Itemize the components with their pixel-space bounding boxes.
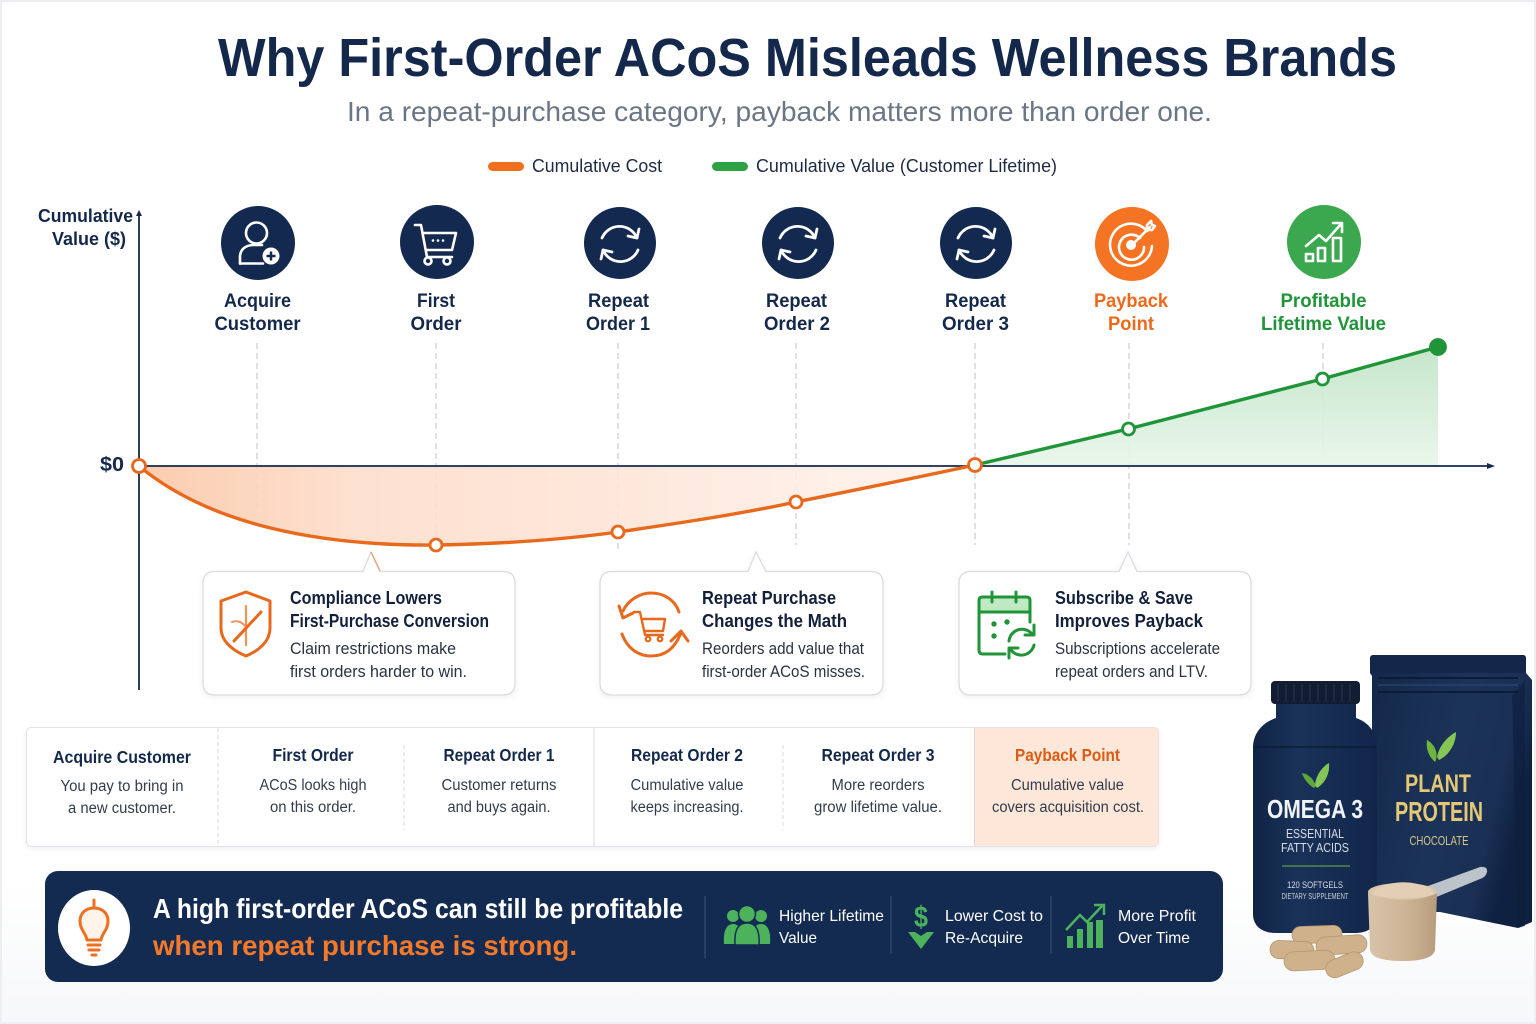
takeaway banner xyxy=(45,871,1223,982)
axis label: Cumulative xyxy=(38,206,133,226)
milestone: Repeat Order 3 xyxy=(940,207,1012,335)
stage: Repeat Order 3 xyxy=(814,745,942,816)
milestone: Payback Point: Payback xyxy=(1094,290,1168,312)
orange cost area xyxy=(139,465,975,545)
omega 3 bottle: ESSENTIAL xyxy=(1286,826,1344,841)
value line xyxy=(975,347,1438,465)
milestone: Payback Point: Point xyxy=(1108,313,1154,335)
milestone: Profitable Lifetime Value xyxy=(1261,205,1386,335)
product illustration xyxy=(1253,655,1532,980)
icon: light bulb xyxy=(58,890,130,966)
callout: Compliance xyxy=(203,552,515,695)
callout: Repeat Purchase: first-order ACoS misses. xyxy=(702,663,865,681)
milestone: Payback Point xyxy=(1094,207,1169,335)
callout: Compliance: Claim restrictions make xyxy=(290,640,456,658)
legend: Cumulative Cost xyxy=(532,156,662,176)
stage: Repeat Order 1: Repeat Order 1 xyxy=(444,745,555,765)
stage: Repeat Order 3: grow lifetime value. xyxy=(814,799,942,816)
protein pouch: PROTEIN xyxy=(1395,796,1483,827)
omega 3 bottle: DIETARY SUPPLEMENT xyxy=(1282,892,1349,901)
benefit: Lower Cost to Re-Acquire: Re-Acquire xyxy=(945,930,1023,947)
axis label second line: Value ($) xyxy=(52,229,126,249)
data points xyxy=(132,340,1446,551)
benefit: More Profit Over Time: More Profit xyxy=(1118,908,1197,925)
stage: Repeat Order 2 xyxy=(630,745,744,816)
stage description strip xyxy=(26,728,1158,846)
callout: Compliance: Compliance Lowers xyxy=(290,587,442,608)
stage: Payback Point: Cumulative value xyxy=(1011,777,1124,794)
protein pouch xyxy=(1370,655,1532,928)
capsules xyxy=(1270,925,1368,980)
stage: Repeat Order 3: More reorders xyxy=(832,777,925,794)
payback highlight cell xyxy=(975,728,1158,846)
stage: Repeat Order 2: keeps increasing. xyxy=(630,799,744,816)
benefit: Lower Cost to Re-Acquire xyxy=(908,901,1043,949)
green value area xyxy=(975,347,1438,466)
stage: First Order: ACoS looks high xyxy=(260,777,366,794)
milestone: Repeat Order 2 xyxy=(762,207,834,335)
milestone: Repeat Order 1 xyxy=(584,207,656,335)
benefit: Lower Cost to Re-Acquire: $ xyxy=(914,901,928,934)
milestone: Acquire Customer: Customer xyxy=(214,313,301,335)
cost line xyxy=(139,465,975,545)
callout: Repeat Purchase: Reorders add value that xyxy=(702,640,864,658)
benefit: More Profit Over Time: Over Time xyxy=(1118,930,1190,947)
stage: Payback Point: covers acquisition cost. xyxy=(992,799,1144,816)
stage: Repeat Order 1: Customer returns xyxy=(442,777,557,794)
benefit: Lower Cost to Re-Acquire: Lower Cost to xyxy=(945,908,1043,925)
milestone: First Order: Order xyxy=(410,313,462,335)
milestone: Repeat Order 3: Repeat xyxy=(945,290,1006,312)
milestone: Acquire Customer: Acquire xyxy=(224,290,291,312)
callout: Subscribe and Save: Subscribe & Save xyxy=(1055,587,1193,608)
callout: Subscribe and Save: repeat orders and LTV. xyxy=(1055,663,1208,681)
icon: calendar with refresh xyxy=(979,592,1034,658)
milestone: First Order: First xyxy=(417,290,455,312)
banner message: A high first-order ACoS can still be profitable xyxy=(153,893,683,924)
benefit: Higher Lifetime Value xyxy=(724,906,884,947)
milestone: Repeat Order 2: Repeat xyxy=(766,290,827,312)
callout: Subscribe and Save: Improves Payback xyxy=(1055,610,1204,631)
zero label: $0 xyxy=(100,454,124,476)
stage: Payback Point: Payback Point xyxy=(1015,745,1120,765)
legend: Cumulative Value (Customer Lifetime) xyxy=(756,156,1057,176)
title: Why First-Order ACoS Misleads Wellness Brands xyxy=(218,28,1397,88)
stage: Repeat Order 1: and buys again. xyxy=(448,799,550,816)
milestone: Profitable Lifetime Value: Lifetime Value xyxy=(1261,313,1386,335)
benefit: More Profit Over Time xyxy=(1066,905,1197,948)
stage: First Order: First Order xyxy=(272,745,354,765)
stage: Acquire Customer xyxy=(53,747,191,817)
guide lines xyxy=(257,343,1323,552)
stage: Repeat Order 2: Cumulative value xyxy=(630,777,744,794)
stage: Acquire Customer: You pay to bring in xyxy=(60,778,184,795)
milestone: Repeat Order 3: Order 3 xyxy=(942,313,1009,335)
stage: First Order xyxy=(260,745,366,816)
omega 3 bottle xyxy=(1253,681,1377,933)
stage: Acquire Customer: Acquire Customer xyxy=(53,747,191,767)
callout: Repeat Purchase xyxy=(600,552,883,695)
leaf logo xyxy=(1427,732,1456,762)
omega 3 bottle: FATTY ACIDS xyxy=(1281,840,1349,855)
milestone: Acquire Customer xyxy=(214,206,301,335)
stage: First Order: on this order. xyxy=(270,799,356,816)
milestone: Repeat Order 1: Order 1 xyxy=(586,313,650,335)
omega 3 bottle: 120 SOFTGELS xyxy=(1287,880,1343,891)
banner message highlight: when repeat purchase is strong. xyxy=(152,930,577,961)
milestone: Repeat Order 1: Repeat xyxy=(588,290,649,312)
stage: Payback Point xyxy=(992,745,1144,816)
legend xyxy=(488,156,1057,176)
protein pouch: CHOCOLATE xyxy=(1410,833,1469,848)
stage: Acquire Customer: a new customer. xyxy=(68,800,176,817)
axes xyxy=(139,214,1490,690)
callout: Compliance: First-Purchase Conversion xyxy=(290,610,489,631)
scoop of powder xyxy=(1368,867,1487,961)
milestone: Repeat Order 2: Order 2 xyxy=(764,313,830,335)
callout: Subscribe and Save xyxy=(959,552,1251,695)
icon: shield with crossed-out claim xyxy=(221,592,270,656)
callout: Repeat Purchase: Changes the Math xyxy=(702,610,847,631)
stage: Repeat Order 3: Repeat Order 3 xyxy=(822,745,935,765)
stage: Repeat Order 1 xyxy=(442,745,557,816)
callout: Compliance: first orders harder to win. xyxy=(290,663,467,681)
benefit: Higher Lifetime Value: Higher Lifetime xyxy=(779,908,884,925)
omega 3 bottle: OMEGA 3 xyxy=(1267,794,1363,824)
subtitle: In a repeat-purchase category, payback matters more than order one. xyxy=(347,96,1212,127)
benefit: Higher Lifetime Value: Value xyxy=(779,930,817,947)
icon: cart in refresh loop xyxy=(619,593,688,656)
milestone: Profitable Lifetime Value: Profitable xyxy=(1280,290,1367,312)
stage: Repeat Order 2: Repeat Order 2 xyxy=(631,745,743,765)
milestone: First Order xyxy=(400,205,474,335)
callout: Repeat Purchase: Repeat Purchase xyxy=(702,587,836,608)
chart: cumulative cost vs value over the customer journey xyxy=(38,206,1495,690)
protein pouch: PLANT xyxy=(1405,770,1471,798)
callout: Subscribe and Save: Subscriptions accelerate xyxy=(1055,640,1220,658)
